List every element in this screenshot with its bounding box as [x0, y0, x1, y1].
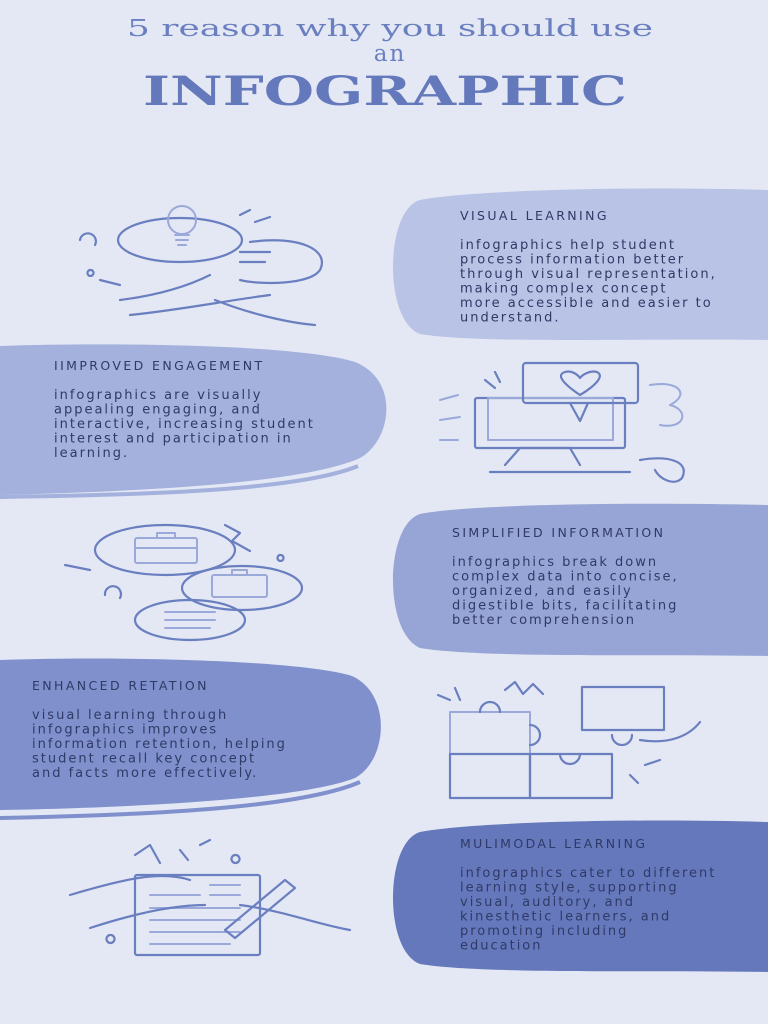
panel: multimodal learning [393, 820, 768, 972]
panel: simplified information: better comprehension [452, 613, 636, 628]
panel: enhanced retation: student recall key concept [32, 752, 256, 766]
panel: enhanced retation: ENHANCED RETATION [32, 678, 209, 693]
panel: improved engagement: IIMPROVED ENGAGEMENT [54, 358, 265, 373]
panel: multimodal learning: promoting including [460, 924, 628, 939]
panel: simplified information: complex data into concise, [452, 570, 679, 584]
icon: computer with heart [440, 363, 684, 482]
panel: multimodal learning: kinesthetic learners, and [460, 910, 671, 924]
panel: improved engagement: learning. [54, 446, 129, 461]
title: an [374, 41, 406, 67]
panel: enhanced retation: information retention, helping [32, 737, 287, 752]
panel: visual learning: process information better [460, 252, 685, 268]
panel: multimodal learning: visual, auditory, and [460, 895, 635, 910]
title: 5 reason why you should use [127, 16, 653, 42]
title: INFOGRAPHIC [143, 68, 627, 115]
panel: visual learning: more accessible and easier to [460, 296, 713, 311]
panel: multimodal learning: learning style, supporting [460, 880, 679, 896]
panel: improved engagement: interest and participation in [54, 432, 293, 446]
panel: simplified information [393, 504, 768, 656]
panel: multimodal learning: infographics cater to different [460, 866, 716, 881]
title [127, 16, 653, 115]
icon: lightbulb with speech bubbles and hands [80, 206, 322, 325]
panel: simplified information: digestible bits, facilitating [452, 598, 678, 614]
panel: multimodal learning: MULIMODAL LEARNING [460, 836, 647, 851]
panel: enhanced retation: visual learning through [32, 708, 228, 723]
panel: enhanced retation: infographics improves [32, 722, 218, 738]
panel: visual learning: infographics help student [460, 238, 676, 253]
icon: speech bubbles with briefcases [65, 525, 302, 640]
icon: puzzle pieces [438, 682, 700, 798]
panel: simplified information: infographics break down [452, 555, 658, 570]
panel: enhanced retation: and facts more effectively. [32, 766, 258, 781]
panel: visual learning [393, 188, 768, 340]
panel: improved engagement: interactive, increasing student [54, 417, 315, 432]
panel: simplified information: SIMPLIFIED INFORMATION [452, 525, 665, 540]
panel: enhanced retation [0, 659, 381, 818]
panel: improved engagement [0, 344, 386, 497]
panel: multimodal learning: education [460, 938, 543, 954]
icon: hand writing on document [70, 840, 350, 955]
panel: visual learning: through visual representation, [460, 267, 717, 282]
panel: improved engagement: infographics are visually [54, 388, 262, 403]
panel: improved engagement: appealing engaging, and [54, 402, 262, 418]
panel: visual learning: VISUAL LEARNING [460, 208, 609, 223]
panel: visual learning: making complex concept [460, 282, 667, 296]
panel: visual learning: understand. [460, 310, 561, 326]
panel: simplified information: organized, and easily [452, 584, 633, 599]
